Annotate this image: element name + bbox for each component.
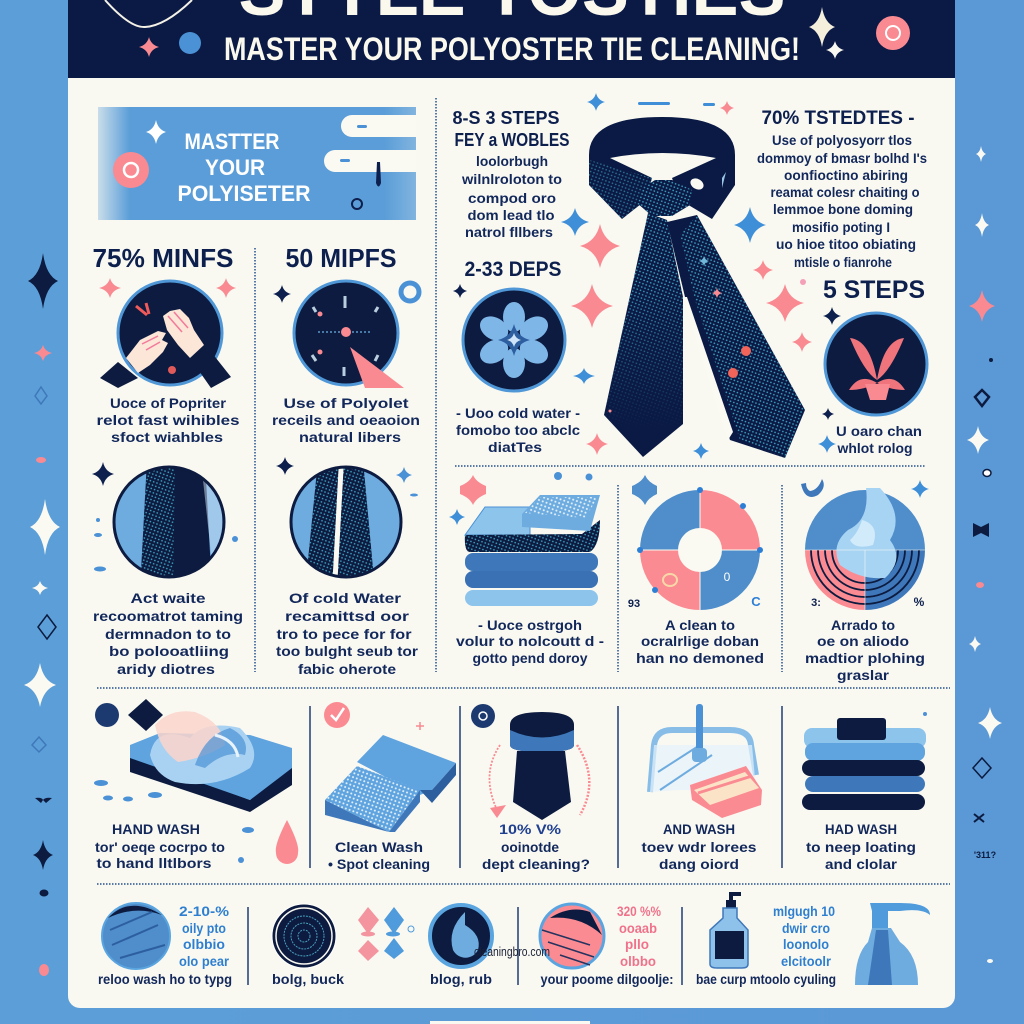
text: stack caption: volur to nolcoutt d - [456,633,604,649]
text: pink percent [617,903,661,969]
chart: water pie [801,479,929,610]
text: 5 steps block: whlot rolog [837,440,912,456]
text: 70% block [757,108,927,270]
text: 70% block: reamat colesr chaiting o [770,184,920,200]
text: pie caption [636,617,764,666]
icon: pink brush circle [540,904,604,968]
icon: diamonds [358,907,414,961]
text: row caption 1: reloo wash ho to typg [98,971,232,987]
icon: spiral circle [272,904,336,968]
icon: plant circle [825,313,927,415]
icon: spot sponge [324,702,456,832]
text: col2 block2: tro to pece for for [276,626,412,642]
chart: water pie: % [914,595,925,609]
icon: necktie [589,117,805,458]
text: watermark: cleaningbro.com [474,944,550,959]
text: steps left: natrol fllbers [465,224,553,240]
text: stack caption 2: HAD WASH [825,821,897,837]
text: col2 block2: fabic oherote [298,661,396,677]
text: blue info: mlgugh 10 [773,903,835,919]
icon: water drop circle [430,905,492,967]
text: col1 block2: bo polooatliing [109,643,229,659]
icon: pump bottle [710,892,748,968]
text: col2 block2: too bulght seub tor [276,643,419,659]
text: stack caption 2: to neep loating [806,839,916,855]
text: sink caption: AND WASH [663,821,735,837]
tie left blade [604,213,683,457]
text: cold water block [456,405,580,455]
text: master your polyester: YOUR [205,155,265,180]
tie collar wing texture [589,160,652,219]
text: row caption 4: your poome dilgoolje: [540,971,674,987]
icon: banner ornaments [139,7,910,59]
text: col2 block2: recamittsd oor [285,608,410,624]
text: pink percent: 320 %% [617,903,661,919]
text: tie caption: dept cleaning? [482,856,590,872]
text: steps left [452,108,570,240]
panel: title banner [68,0,955,78]
text: master your polyester: POLYISETER [178,181,311,206]
text: steps left: dom lead tlo [468,207,554,223]
icon: soap dispenser [855,903,930,985]
text: tie caption: 10% V% [499,821,562,837]
text: water pie caption: madtior plohing [805,650,925,666]
text: blue info: dwir cro [782,920,830,936]
text: 70% block: dommoy of bmasr bolhd I's [757,150,927,166]
text: blue percent: olbbio [183,936,225,952]
text: row caption 5: bae curp mtoolo cyuling [696,971,836,987]
text: cold water block: fomobo too abclc [456,422,580,438]
text: pink percent: pllo [625,936,649,952]
text: col1 block1: sfoct wiahbles [111,429,223,445]
heading: 75%: 75% MINFS [92,243,234,273]
text: stack caption [456,617,604,666]
icon: brush circle [102,903,170,969]
text: master your polyester [178,129,311,206]
text: pie caption: ocralrlige doban [641,633,759,649]
text: sink caption: toev wdr lorees [642,839,757,855]
text: 70% block: mosifio poting I [792,219,890,235]
text: bolg buck: bolg, buck [272,971,344,987]
text: pink percent: ooaab [619,920,657,936]
text: hand wash caption [95,821,225,871]
text: pie caption: han no demoned [636,650,764,666]
icon: flower circle [463,289,565,391]
icon: right margin decorations: '311? [974,850,996,860]
text: col1 block1 [96,395,240,445]
text: water pie caption: oe on aliodo [817,633,909,649]
text: col1 block2: Act waite [130,590,206,606]
text: master your polyester: MASTTER [184,129,280,154]
text: tie caption [482,821,590,872]
tie right blade [608,215,805,458]
text: col2 block1: Use of Polyolet [284,395,409,411]
tie knot [637,180,692,216]
text: spot caption: • Spot cleaning [328,856,430,872]
heading: 5 steps: 5 STEPS [823,276,925,304]
text: col1 block2: dermnadon to to [105,626,231,642]
icon: tie closeup right [276,457,418,590]
heading: 50: 50 MIPFS [286,243,396,273]
tie collar marks [688,172,726,192]
chart: water pie: 3: [811,597,821,609]
heading: 2-33 deps: 2-33 DEPS [464,258,562,281]
text: blue percent [179,903,230,969]
bottom white bar [430,1021,590,1024]
text: 70% block: mtisle o fianrohe [794,254,892,270]
panel: master your polyester [98,107,416,220]
text: blog rub: blog, rub [430,971,492,987]
text: col1 block2 [93,590,243,677]
text: spot caption: Clean Wash [335,839,423,855]
chart: pie quadrants: 0 [724,570,731,584]
icon: hands circle [99,278,236,388]
text: blue percent: oily pto [182,920,226,936]
text: 70% block: uo hioe titoo obiating [776,236,916,252]
icon: sparkle [146,120,166,144]
text: steps left: FEY a WOBLES [454,130,570,150]
text: steps left: loolorbugh [476,153,548,169]
chart: pie quadrants [628,475,763,610]
text: blue percent: olo pear [179,953,229,969]
text: hand wash caption: tor' oeqe cocrpo to [95,839,225,855]
text: stack caption 2 [806,821,916,872]
text: col2 block2 [276,590,419,677]
text: cold water block: diatTes [488,439,542,455]
icon: pink badge [113,152,149,188]
text: 5 steps block [836,423,922,456]
text: col1 block1: Uoce of Popriter [110,395,227,411]
icon: right margin decorations [967,146,1002,963]
text: hand wash caption: HAND WASH [112,821,200,837]
text: pie caption: A clean to [665,617,735,633]
text: 70% block: 70% TSTEDTES - [762,108,914,129]
text: stack caption 2: and clolar [825,856,898,872]
text: blue info: elcitoolr [781,953,831,969]
icon: sparkles around tie [453,93,841,459]
text: 5 steps block: U oaro chan [836,423,922,439]
tie knot texture [637,180,692,216]
text: col1 block2: aridy diotres [117,661,215,677]
icon: sink [650,704,762,818]
text: 70% block: lemmoe bone doming [773,201,913,217]
icon: tie with arrows [471,704,589,820]
text: col2 block1 [272,395,420,445]
chart: pie quadrants: C [751,594,761,609]
tie collar [589,117,735,219]
text: sink caption [642,821,757,872]
text: col2 block1: natural libers [299,429,401,445]
text: tie caption: ooinotde [501,839,559,855]
icon: hand wash sponge [94,699,298,864]
text: cold water block: - Uoo cold water - [456,405,580,421]
dividers [97,98,950,884]
text: stack caption: - Uoce ostrgoh [478,617,582,633]
icon: stacked sponges [449,472,600,606]
text: blue percent: 2-10-% [179,903,230,919]
text: pink percent: olbbo [620,953,656,969]
text: steps left: 8-S 3 STEPS [452,108,560,128]
text: water pie caption: Arrado to [831,617,895,633]
text: steps left: compod oro [468,190,556,206]
subtitle: MASTER YOUR POLYOSTER TIE CLEANING! [224,31,800,67]
icon: tie closeup left [92,462,238,578]
icon: folded stack [802,712,927,810]
text: col2 block2: Of cold Water [289,590,402,606]
text: col1 block2: recoomatrot taming [93,608,243,624]
text: hand wash caption: to hand lltlbors [96,855,212,871]
icon: white pills [324,115,416,209]
text: blue info [773,903,835,969]
icon: left margin decorations [24,253,60,976]
chart: pie quadrants: 93 [628,598,640,610]
text: water pie caption: graslar [837,667,890,683]
text: spot caption [328,839,430,872]
icon: pink badge [460,475,486,505]
text: col2 block1: receils and oeaoion [272,412,420,428]
text: 70% block: oonfioctino abiring [784,167,908,183]
icon: dial circle [273,281,419,388]
text: blue info: loonolo [783,936,829,952]
text: sink caption: dang oiord [659,856,739,872]
text: 70% block: Use of polyosyorr tlos [772,132,912,148]
text: stack caption: gotto pend doroy [472,650,588,666]
text: steps left: wilnlroloton to [461,171,562,187]
text: col1 block1: relot fast wihibles [96,412,240,428]
text: water pie caption [805,617,925,683]
